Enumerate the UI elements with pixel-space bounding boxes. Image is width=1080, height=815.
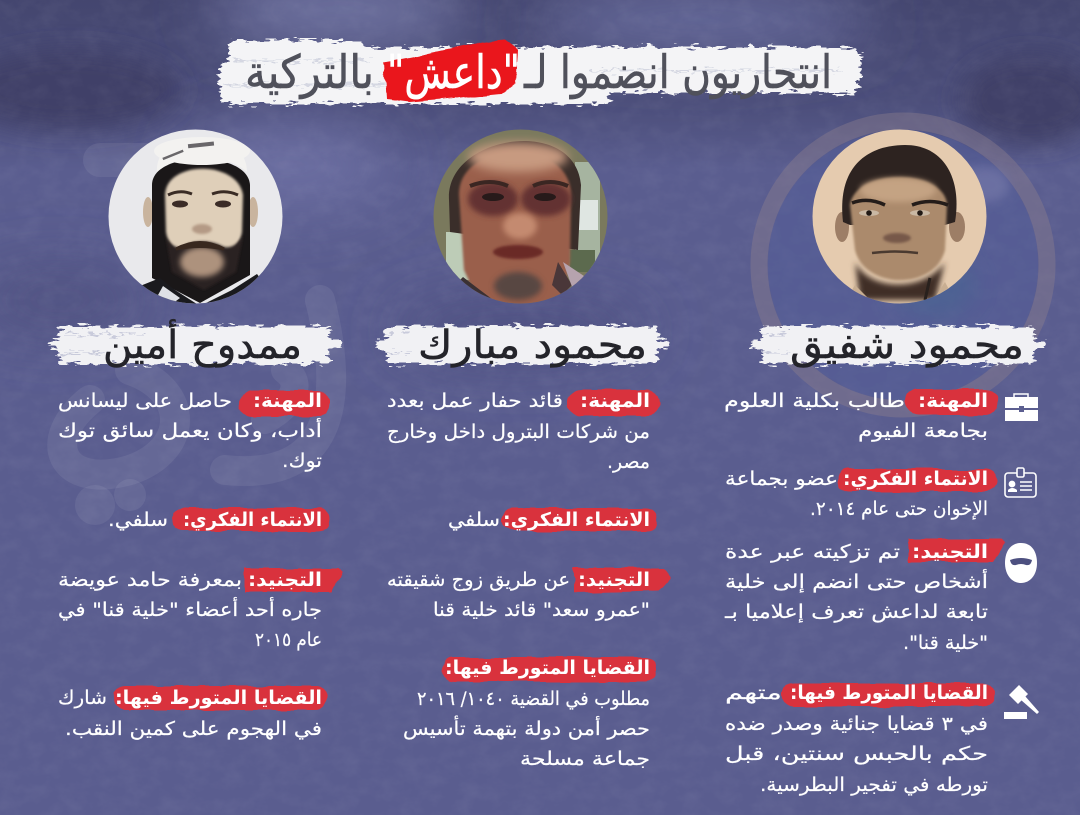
occupation: المهنة:	[253, 390, 322, 412]
cases: القضايا المتورط فيها:	[445, 657, 650, 679]
ideology: الإخوان حتى عام ٢٠١٤.	[810, 498, 988, 520]
icon: masked face	[1005, 543, 1037, 583]
icon: id badge	[1005, 468, 1036, 497]
cases: حكم بالحبس سنتين، قبل	[725, 743, 988, 765]
portrait: Mahmoud Mubarak	[430, 125, 610, 310]
ideology	[448, 509, 650, 532]
cases: في الهجوم على كمين النقب.	[65, 718, 322, 740]
ideology	[108, 509, 322, 532]
label highlights	[113, 390, 342, 710]
occupation: طالب بكلية العلوم	[724, 390, 905, 412]
label highlights	[442, 390, 672, 682]
cases: متهم	[725, 682, 782, 704]
ideology: الانتماء الفكري:	[183, 509, 322, 532]
ideology: سلفي.	[108, 509, 168, 531]
recruitment	[387, 569, 650, 621]
column: Mahmoud Mubarak details	[387, 390, 672, 770]
occupation: أداب، وكان يعمل سائق توك	[58, 418, 322, 442]
recruitment: بمعرفة حامد عويضة	[58, 569, 242, 591]
icon: gavel	[1004, 685, 1039, 719]
cases: تورطه في تفجير البطرسية.	[760, 774, 988, 796]
title text: "داعش"	[387, 45, 520, 99]
column: Mamdouh Amin details	[58, 390, 342, 740]
cases: حصر أمن دولة بتهمة تأسيس	[403, 715, 650, 740]
portrait: Mamdouh Amin	[105, 125, 285, 310]
ideology: عضو بجماعة	[725, 468, 838, 490]
recruitment: "عمرو سعد" قائد خلية قنا	[433, 599, 650, 621]
occupation: قائد حفار عمل بعدد	[387, 390, 563, 412]
recruitment: جاره أحد أعضاء "خلية قنا" في	[58, 597, 322, 621]
recruitment: تم تزكيته عبر عدة	[725, 541, 900, 563]
recruitment: التجنيد:	[248, 569, 322, 591]
title text: انتحاريون انضموا لـ	[523, 45, 832, 100]
name banner: Mamdouh Amin	[50, 319, 340, 368]
occupation	[724, 390, 988, 442]
title text	[245, 45, 832, 100]
recruitment: "خلية قنا".	[903, 632, 988, 654]
recruitment	[724, 541, 988, 654]
cases: مطلوب في القضية ١٠٤٠/ ٢٠١٦	[417, 688, 650, 710]
recruitment: عام ٢٠١٥	[255, 629, 322, 651]
portrait: Mahmoud Shafiq	[810, 125, 990, 310]
ideology	[725, 468, 988, 520]
name banner: Mamdouh Amin: ممدوح أمين	[103, 319, 302, 368]
cases: القضايا المتورط فيها:	[115, 687, 322, 709]
occupation: توك.	[282, 450, 322, 472]
ideology: الانتماء الفكري:	[843, 468, 988, 491]
occupation: المهنة:	[580, 390, 650, 412]
cases	[725, 682, 988, 796]
occupation: بجامعة الفيوم	[858, 420, 988, 442]
occupation	[387, 390, 650, 473]
watermark ring	[759, 121, 1047, 409]
cases: في ٣ قضايا جنائية وصدر ضده	[725, 713, 988, 735]
recruitment: التجنيد:	[912, 541, 988, 563]
watermark logo	[62, 160, 331, 525]
recruitment: أشخاص حتى انضم إلى خلية	[725, 569, 988, 594]
title text: بالتركية	[245, 45, 374, 100]
recruitment: التجنيد:	[578, 569, 650, 591]
occupation: المهنة:	[918, 390, 988, 412]
icon: briefcase	[1005, 394, 1038, 421]
name banner: Mahmoud Shafiq: محمود شفيق	[790, 323, 1024, 368]
occupation	[58, 390, 322, 472]
label highlights	[782, 389, 1006, 707]
cases	[58, 687, 322, 740]
column: Mahmoud Shafiq details	[724, 389, 1039, 796]
ideology: الانتماء الفكري:	[503, 509, 650, 532]
cases: شارك	[58, 687, 107, 709]
recruitment: عن طريق زوج شقيقته	[387, 569, 570, 591]
cases: القضايا المتورط فيها:	[790, 682, 988, 704]
occupation: مصر.	[607, 451, 650, 473]
name banner: Mahmoud Mubarak: محمود مبارك	[418, 323, 647, 368]
cases	[403, 657, 650, 770]
occupation: من شركات البترول داخل وخارج	[387, 421, 650, 443]
title banner	[220, 40, 861, 104]
title red highlight	[384, 40, 518, 102]
ideology: سلفي	[448, 509, 500, 531]
recruitment	[58, 569, 322, 651]
cases: جماعة مسلحة	[520, 748, 650, 770]
recruitment: تابعة لداعش تعرف إعلاميا بـ	[724, 601, 988, 624]
title brush	[220, 40, 861, 104]
occupation: حاصل على ليسانس	[58, 390, 232, 412]
